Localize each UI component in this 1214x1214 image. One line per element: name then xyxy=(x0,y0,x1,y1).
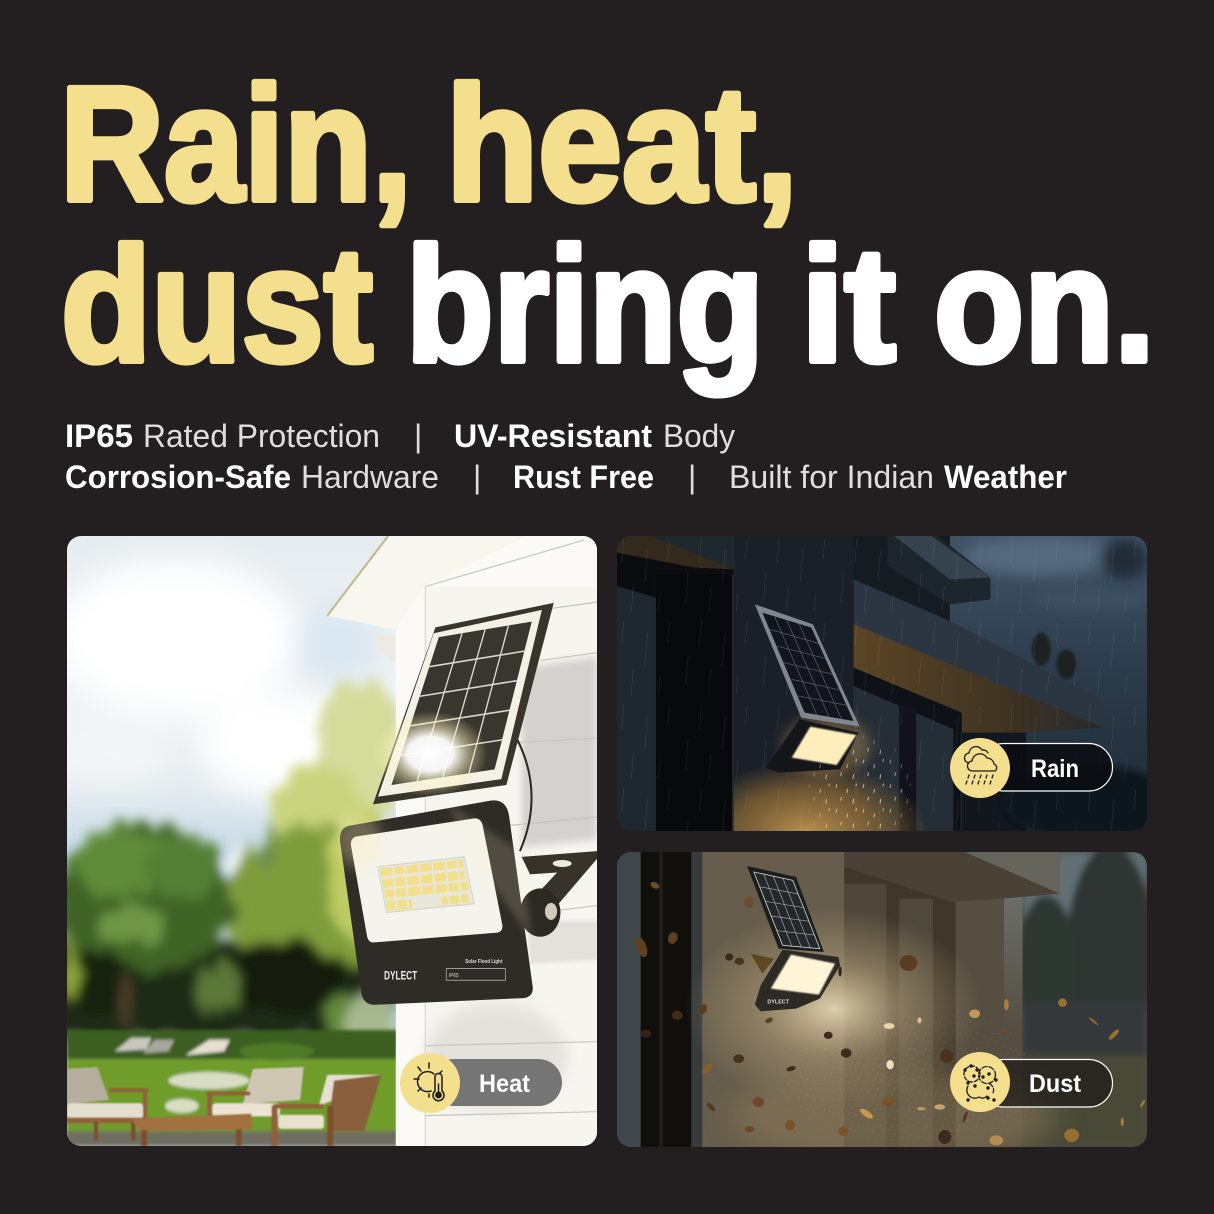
tree silhouette xyxy=(1032,633,1077,679)
solar panel xyxy=(373,603,554,804)
dusty building scene xyxy=(617,845,1154,1165)
background trees xyxy=(1016,845,1154,1147)
garden scene xyxy=(47,536,597,1146)
solar panel xyxy=(755,604,860,727)
floodlight body: Solar Flood Light xyxy=(465,959,503,965)
rainy building scene xyxy=(617,536,1147,831)
mounting bracket xyxy=(520,851,597,937)
patio furniture xyxy=(67,1067,381,1146)
cable xyxy=(517,738,532,851)
building xyxy=(617,852,1060,1147)
house wall xyxy=(327,536,597,1146)
panel: rain photo xyxy=(617,536,1147,831)
feature line 1 xyxy=(65,418,735,454)
feature line 2: Hardware xyxy=(301,459,439,495)
lit droplets xyxy=(617,536,1147,831)
title line 1: Rain, heat,: Rain, xyxy=(60,52,412,235)
feature line 2: | xyxy=(473,459,481,495)
floodlight body: DYLECT xyxy=(384,970,417,983)
rain label pill xyxy=(950,738,1112,798)
floodlight: DYLECT xyxy=(767,1000,790,1006)
feature line 2: | xyxy=(688,459,696,495)
solar panel xyxy=(747,866,824,952)
light glow xyxy=(685,909,982,1109)
title xyxy=(60,52,1155,396)
title line 1: Rain, heat,: heat, xyxy=(446,52,798,235)
title line 2: bring it on.: it xyxy=(801,213,896,396)
title line 2: dust: dust xyxy=(61,213,373,396)
label: Dust: Dust xyxy=(1029,1070,1082,1098)
label: Rain: Rain xyxy=(1031,755,1079,783)
infographic canvas xyxy=(64,78,1148,1147)
feature line 1: IP65 xyxy=(65,418,133,454)
title line 2: bring it on.: bring xyxy=(406,213,764,396)
panel: dust photo xyxy=(617,845,1154,1165)
feature line 2 xyxy=(65,459,1067,495)
tree masses xyxy=(47,680,402,1065)
feature line 2: Rust Free xyxy=(513,459,654,495)
title line 2: bring it on.: on. xyxy=(934,213,1155,396)
heat label pill xyxy=(400,1053,562,1113)
feature line 2: Corrosion-Safe xyxy=(65,459,291,495)
wall light glow xyxy=(734,715,922,831)
feature line 1: Body xyxy=(663,418,735,454)
feature line 1: Rated Protection xyxy=(143,418,380,454)
icon: sun with thermometer xyxy=(414,1063,444,1101)
floodlight xyxy=(766,719,859,773)
feature line 2: Built for Indian xyxy=(729,459,934,495)
title line 2: bring it on. xyxy=(406,213,1155,396)
icon: cloud with rain xyxy=(964,747,997,784)
building xyxy=(617,536,1178,839)
sun glare xyxy=(381,712,486,796)
label: Heat: Heat xyxy=(479,1070,531,1098)
floodlight body xyxy=(334,800,533,1005)
feature line 2: Weather xyxy=(944,459,1067,495)
panel: heat photo xyxy=(47,536,597,1146)
floodlight body: IP65 xyxy=(449,973,459,979)
title line 1: Rain, heat, xyxy=(60,52,798,235)
feature text block xyxy=(65,418,1067,495)
LED array xyxy=(380,860,469,910)
dust label pill xyxy=(950,1052,1112,1112)
icon: dust particles xyxy=(963,1064,998,1102)
blowing leaves xyxy=(633,880,1146,1145)
rain streaks xyxy=(617,536,1147,831)
feature line 1: | xyxy=(414,418,422,454)
dust particles xyxy=(617,852,1147,1147)
floodlight xyxy=(751,950,840,1011)
feature line 1: UV-Resistant xyxy=(454,418,652,454)
